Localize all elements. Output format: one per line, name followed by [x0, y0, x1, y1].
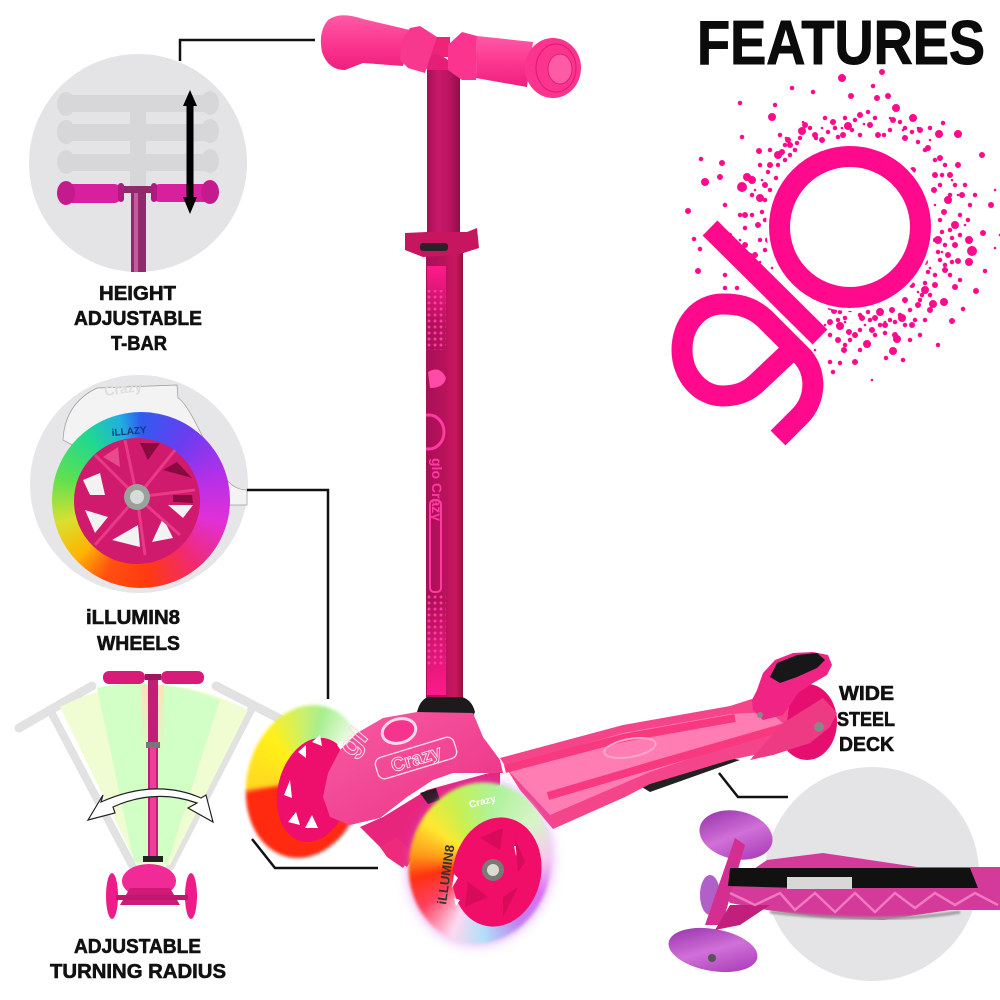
- label: wide steel deck: STEEL: [837, 709, 895, 731]
- deck: [500, 698, 790, 829]
- led wheel ring: [52, 412, 230, 588]
- body crazy badge: [374, 735, 459, 781]
- label: adjustable turning radius: [50, 936, 226, 983]
- leader line: wheels: [247, 490, 328, 699]
- deck pad: [505, 712, 785, 815]
- inset circle: [30, 375, 248, 593]
- leader line: turning radius: [252, 839, 378, 868]
- inset circle: [29, 54, 247, 272]
- double arrow: [88, 789, 213, 822]
- front wheel lettering: iLLUMIN8: [434, 844, 457, 905]
- handlebar: [321, 15, 581, 98]
- front body: [323, 712, 503, 825]
- body ring logo: [332, 715, 419, 762]
- chassis shadow: [715, 905, 770, 930]
- label: wide steel deck: DECK: [839, 734, 895, 756]
- centre stem: [146, 677, 160, 860]
- panel: wide steel deck: [665, 767, 1000, 981]
- purple top wheel: [695, 804, 777, 866]
- splatter dots: [688, 72, 1000, 380]
- front wheel hub: [443, 809, 551, 935]
- label: height adjustable t-bar: ADJUSTABLE: [74, 308, 202, 330]
- bracket: [705, 838, 745, 925]
- wheel lettering: iLLAZY: [111, 425, 147, 439]
- deck emblem: [603, 735, 657, 761]
- lower stem: [426, 250, 463, 700]
- stem clamp: [405, 228, 479, 257]
- purple middle wheel: [700, 875, 720, 915]
- axle clip: [380, 837, 413, 868]
- steel rail: [728, 868, 978, 888]
- height arrow: [183, 90, 197, 214]
- letter o: [766, 143, 934, 311]
- rear brake pad: [770, 653, 825, 683]
- label: height adjustable t-bar: HEIGHT: [99, 283, 176, 305]
- wheel hub: [708, 954, 716, 962]
- zigzag ribs: [730, 893, 998, 912]
- label: adjustable turning radius: ADJUSTABLE: [74, 936, 201, 958]
- glo logo: [682, 72, 1000, 438]
- main scooter: [233, 15, 837, 960]
- deck lower ribs: [548, 727, 785, 796]
- clamp lever: [420, 243, 448, 251]
- leader line: deck: [719, 773, 788, 797]
- left front wheel glow: [233, 692, 378, 870]
- ghost handlebars: [57, 91, 219, 195]
- axle arm: [360, 770, 500, 867]
- warning label: [787, 877, 852, 889]
- pale fan: [60, 684, 248, 865]
- front wheel badge: Crazy: [468, 794, 498, 811]
- green fan: [97, 684, 220, 862]
- label: illumin8 wheels: iLLUMIN8: [86, 607, 180, 629]
- label: wide steel deck: WIDE: [839, 683, 894, 705]
- rear wheel: [777, 684, 837, 760]
- deck underside: [640, 758, 740, 792]
- rear bolts: [757, 712, 824, 732]
- fender logo: Crazy: [103, 378, 143, 399]
- axle shadow: [420, 788, 440, 804]
- front view base: [106, 856, 197, 919]
- label: illumin8 wheels: [86, 607, 180, 655]
- white fender: [63, 385, 247, 505]
- ghost scooter left: [19, 686, 133, 867]
- body ring logo: gl: [332, 721, 375, 762]
- underside body: [723, 853, 1000, 920]
- body crazy badge: Crazy: [389, 742, 445, 777]
- lower shadow: [770, 912, 960, 918]
- leader line: t-bar: [180, 40, 315, 61]
- panel: height adjustable t-bar: [29, 54, 247, 272]
- handlebar: [103, 671, 204, 684]
- label: height adjustable t-bar: T-BAR: [111, 333, 168, 355]
- letter g: [682, 304, 813, 438]
- panel: adjustable turning radius: [19, 671, 282, 919]
- front wheel: [395, 770, 565, 960]
- upper stem: [427, 60, 460, 235]
- deck upper ribs: [505, 718, 735, 769]
- label: adjustable turning radius: TURNING RADIUS: [50, 961, 226, 983]
- label: height adjustable t-bar: [74, 283, 202, 355]
- panel: illumin8 wheels: [30, 375, 248, 593]
- letter l: [710, 228, 820, 337]
- wheel hub: [74, 438, 200, 564]
- ghost scooter right: [170, 686, 282, 867]
- centre glow: [142, 685, 164, 755]
- stem graphics: [426, 266, 446, 695]
- label: illumin8 wheels: WHEELS: [97, 633, 180, 655]
- label: wide steel deck: [837, 683, 895, 756]
- inset circle: [765, 767, 979, 981]
- left wheel hub: [266, 730, 362, 850]
- pink handlebar: [57, 180, 219, 272]
- purple bottom wheel: [665, 922, 761, 978]
- rear fender: [752, 652, 832, 720]
- stem collar: [417, 697, 475, 722]
- stem lettering: glo Crazy: [429, 458, 445, 521]
- rear bracket: [750, 698, 837, 760]
